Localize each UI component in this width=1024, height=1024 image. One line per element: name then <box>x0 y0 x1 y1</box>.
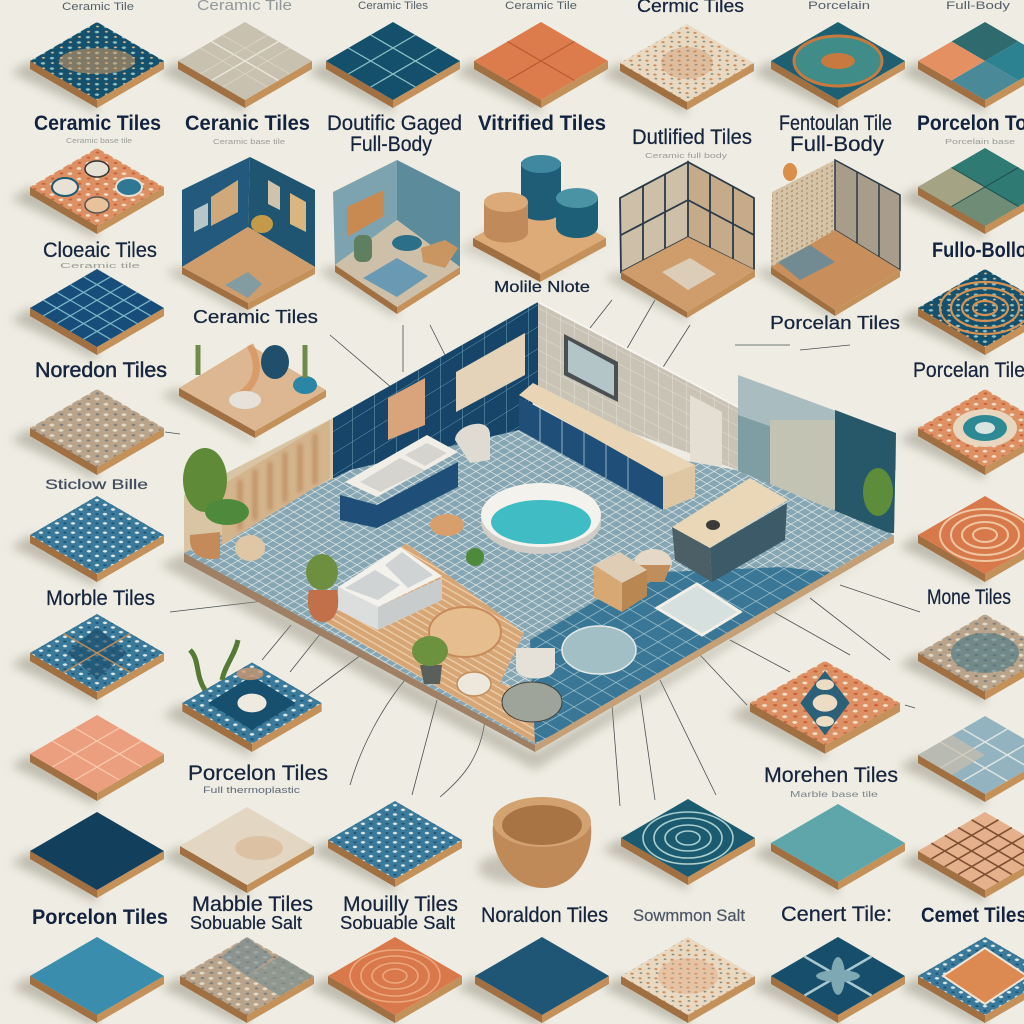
small sub captions <box>60 138 1015 799</box>
tile: row 9 ocean blue <box>11 937 164 1024</box>
tile: row 2 orange roundels <box>11 148 164 239</box>
top wall edge highlight <box>538 302 738 407</box>
top row captions: Ceramic Tiles <box>358 0 429 12</box>
room: sand wall and wood floor <box>754 160 900 320</box>
tile: centre left navy medallion <box>163 662 322 757</box>
icon: wooden bowl <box>478 797 591 888</box>
labels: Noraldon Tiles <box>481 904 608 927</box>
right wall teal section <box>738 407 896 545</box>
round woven mat <box>502 682 562 722</box>
small floating plant by medallion <box>190 640 238 690</box>
labels: Mabble Tiles <box>192 893 313 916</box>
tile: row 8 terracotta grid <box>899 812 1024 903</box>
labels: Noredon Tiles <box>35 359 167 382</box>
tile: row 6 blue diamond <box>11 614 164 705</box>
vanity counter with blue cabinets <box>519 383 695 510</box>
labels: Porcelan Tiles <box>770 313 900 333</box>
floor <box>184 430 894 745</box>
tile: row 1 four colour <box>899 22 1024 113</box>
tile: row 8 blue damask <box>309 801 462 892</box>
small sub captions: Ceramic full body <box>645 153 728 160</box>
top row captions: Full-Body <box>946 0 1011 12</box>
back left wall: navy tile <box>333 302 538 500</box>
icon: ceramic jars on wood board <box>458 155 606 282</box>
top row captions: Ceramic Tile <box>62 1 134 13</box>
small sub captions: Porcelain base <box>945 139 1015 146</box>
labels: Porcelon Tiles <box>188 762 328 785</box>
labels: Ceranic Tiles <box>185 112 310 135</box>
tile: row 2 green <box>899 148 1024 239</box>
tile: row 7 salmon <box>11 715 164 806</box>
toilet <box>455 424 490 463</box>
tile: row 1 navy grid <box>307 22 460 113</box>
small sub captions: Ceramic base tile <box>213 139 285 146</box>
tile: row 9 cream orange <box>602 937 755 1024</box>
tile: row 3 navy net <box>11 269 164 360</box>
tile: row 5 orange pattern <box>899 496 1024 587</box>
tile: row 8 cream marble <box>161 807 314 898</box>
labels: Full-Body <box>790 133 885 156</box>
tile: row 4 stone <box>11 389 164 480</box>
ceramic pot <box>516 648 555 678</box>
patterned rug <box>657 584 740 635</box>
top row captions: Porcelain <box>808 0 870 12</box>
small floor plant <box>466 548 484 566</box>
round mosaic mat <box>562 626 636 674</box>
labels: Doutific Gaged <box>327 112 462 135</box>
labels: Morble Tiles <box>46 587 155 610</box>
top row captions: Ceramic Tile <box>505 0 577 12</box>
tile: ceramic scene with plants <box>160 345 326 444</box>
small sub captions: Full thermoplastic <box>203 785 301 795</box>
room shadow <box>160 540 895 770</box>
tile: row 6 stone and blue <box>899 614 1024 705</box>
tile: row 4 orange medallion <box>899 389 1024 480</box>
back right wall <box>538 302 738 470</box>
labels: Cenert Tile: <box>781 903 892 926</box>
room: glass panel walls <box>604 162 755 322</box>
tile: row 9 grey beige <box>161 937 314 1024</box>
sink unit <box>340 435 458 528</box>
room: blue walls, wood floor <box>165 157 315 316</box>
big wall plant <box>183 448 265 561</box>
labels: Morehen Tiles <box>764 764 898 787</box>
labels: Sticlow Bille <box>45 476 148 492</box>
labels: Porcelon Tiles <box>32 906 168 929</box>
room: light blue walls, blue rug <box>318 160 460 318</box>
plate <box>457 672 491 696</box>
terracotta plant pot <box>306 554 338 622</box>
white bathtub <box>338 547 442 630</box>
main bathroom room <box>160 302 896 770</box>
labels: Sobuable Salt <box>190 913 302 933</box>
left wall extension with mural <box>184 418 333 575</box>
picture: left wall painting <box>388 378 425 440</box>
top row captions <box>62 0 1011 16</box>
labels: Ceramic Tiles <box>193 307 318 327</box>
small plant <box>412 636 448 684</box>
tile: row 8 navy <box>11 812 164 903</box>
labels: Cloeaic Tiles <box>43 239 157 262</box>
right wall plant <box>863 468 893 516</box>
round tub <box>481 483 601 554</box>
tile: row 8 teal <box>752 804 905 895</box>
wood floor area <box>326 543 594 743</box>
right island counter <box>672 478 788 582</box>
tile: row 3 navy and orange <box>899 269 1024 360</box>
small sub captions: Ceramic base tile <box>66 138 132 145</box>
mural <box>222 420 330 545</box>
door <box>690 395 722 480</box>
labels: Sowmmon Salt <box>633 906 745 925</box>
tile: centre right orange medallion <box>729 661 900 759</box>
wood circle rug <box>429 607 501 657</box>
tile: row 9 navy quatrefoil <box>752 937 905 1024</box>
tile: row 9 orange <box>309 937 462 1024</box>
labels <box>32 112 1024 933</box>
floor edge <box>184 553 535 752</box>
labels: Dutlified Tiles <box>632 126 752 149</box>
labels: Fentoulan Tile <box>779 112 892 135</box>
tile: row 1 orange <box>455 22 608 113</box>
tile: row 1 grey stone <box>159 22 312 113</box>
blue mosaic floor area <box>530 567 835 743</box>
labels: Vitrified Tiles <box>478 112 606 135</box>
labels: Molile Nlote <box>494 279 590 296</box>
picture: right wall painting <box>564 334 618 402</box>
tile: row 1 cream terrazzo <box>601 24 754 115</box>
labels: Mouilly Tiles <box>343 893 458 916</box>
tile: row 1 medallion <box>752 22 905 113</box>
tile: row 1 ceramic mosaic <box>11 22 164 113</box>
labels: Full-Body <box>350 133 432 156</box>
tile: row 9 navy <box>456 937 609 1024</box>
small sub captions: Marble base tile <box>790 790 879 799</box>
leader lines <box>165 300 920 806</box>
tile: row 5 blue white <box>11 496 164 587</box>
wooden cube and stool <box>594 549 672 612</box>
small sub captions: Ceramic tile <box>60 263 140 270</box>
tile: row 8 navy rings <box>602 799 755 890</box>
wood stool left <box>430 514 464 536</box>
picture: wide wall painting <box>456 333 525 412</box>
tile: row 7 pale blue <box>899 716 1024 807</box>
labels: Ceramic Tiles <box>34 112 161 135</box>
labels: Sobuable Salt <box>340 913 455 933</box>
tile: row 9 navy orange centre <box>899 937 1024 1024</box>
